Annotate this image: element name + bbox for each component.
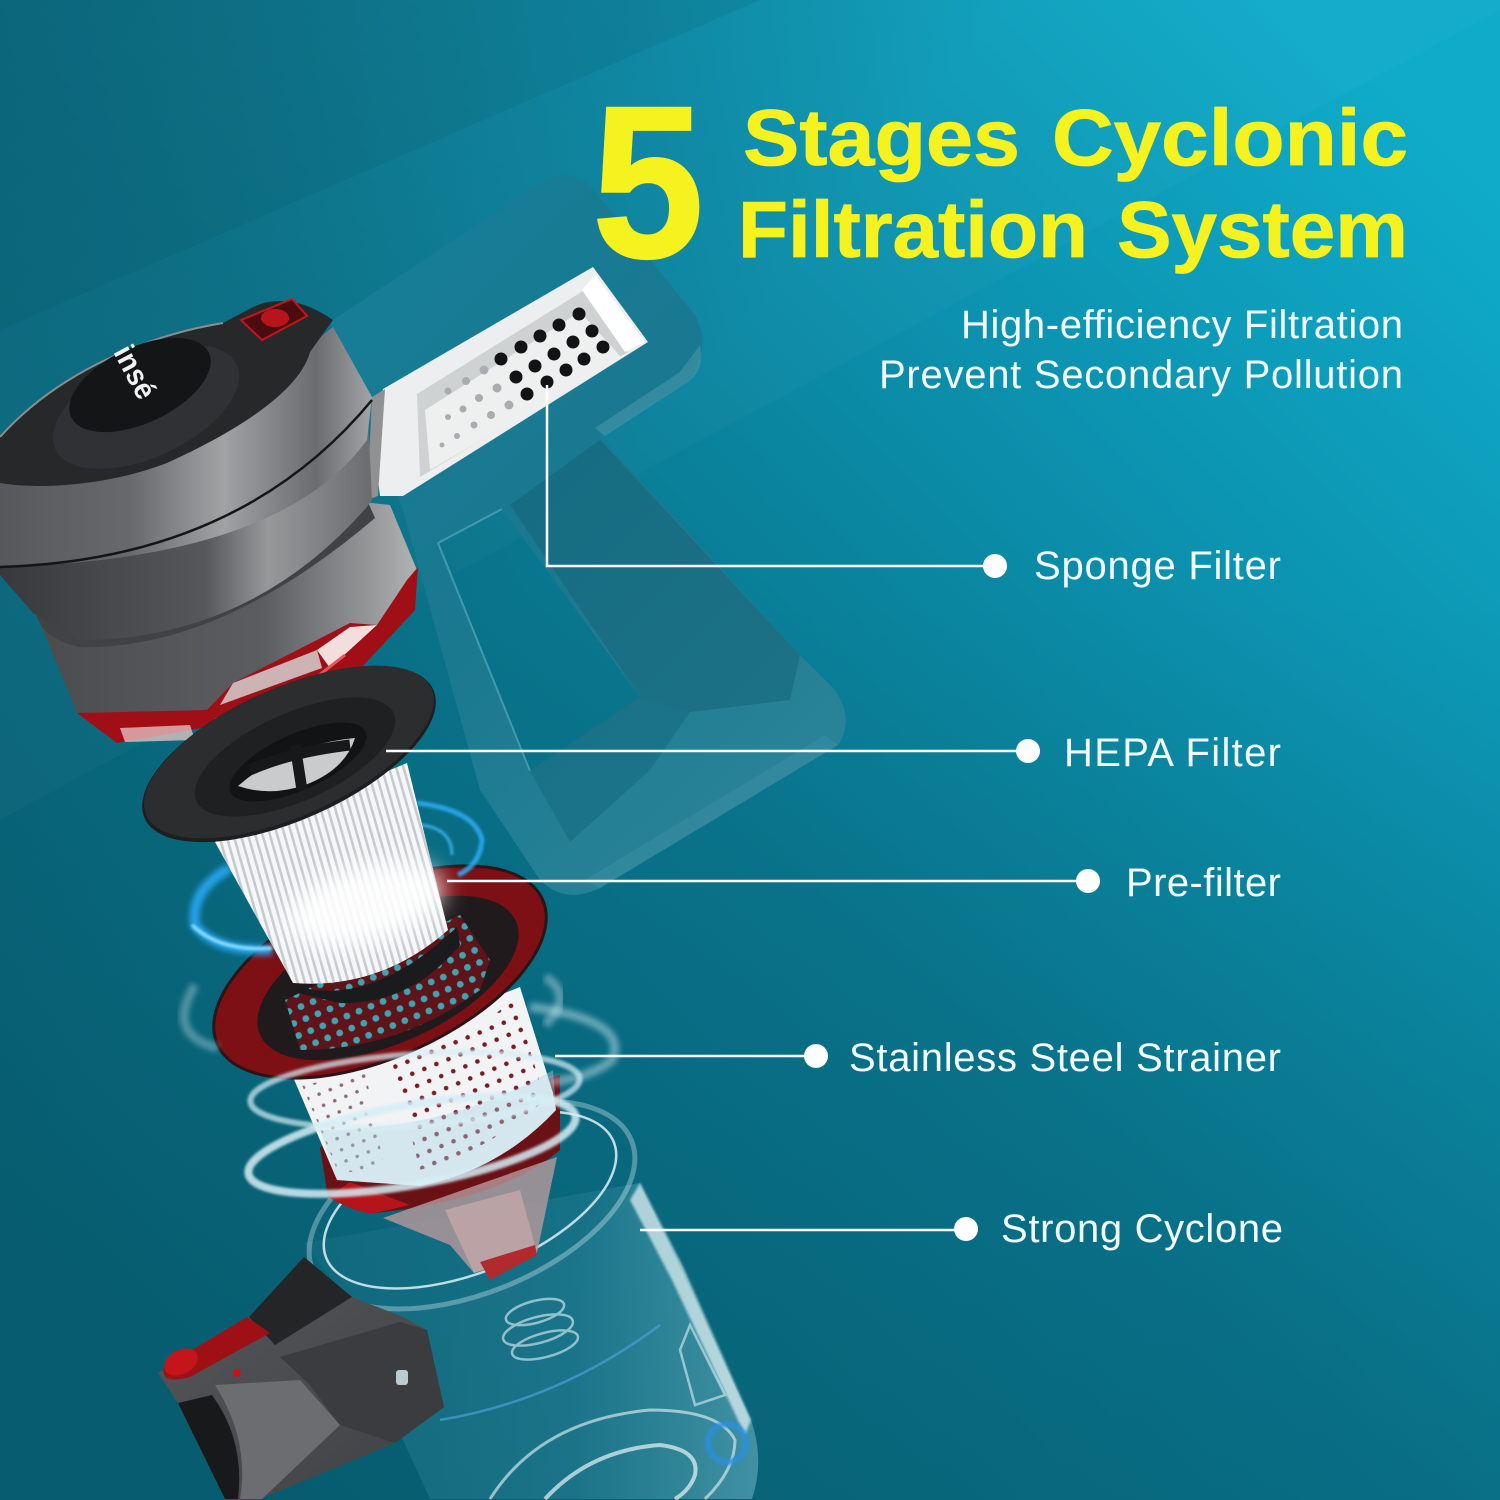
title number 5: 5 [592,61,704,303]
callout: pre-filter [447,861,1281,905]
title: Filtration [738,185,1088,274]
subtitle [879,303,1403,397]
subtitle: Prevent Secondary Pollution [879,353,1403,397]
stainless steel strainer [293,987,556,1186]
subtitle: High-efficiency Filtration [961,303,1403,347]
red strainer ring [183,822,577,1122]
inner mesh [285,915,490,1050]
vacuum handle (translucent) [330,175,846,895]
callout: strong cyclone [640,1207,1283,1251]
red trim [77,567,418,743]
title: Cyclonic [1052,93,1408,182]
callout: stainless steel strainer [555,1036,1281,1080]
motor: silver ring [37,500,375,647]
red cone below strainer [320,1075,560,1280]
blue swirl, back [192,803,482,950]
vent plate [367,267,648,500]
title: Stages [743,93,1020,182]
callout: pre-filter: Pre-filter [1126,861,1281,905]
title: System [1117,185,1408,274]
motor: lower body [37,500,417,743]
swirl around strainer [184,977,615,1213]
callout: sponge filter: Sponge Filter [1034,544,1281,588]
floor brush connector [158,1257,444,1499]
callout: strong cyclone: Strong Cyclone [1001,1207,1283,1251]
callout: hepa filter: HEPA Filter [1064,731,1281,775]
callout: sponge filter [547,385,1281,588]
hepa lid [118,629,460,879]
hepa filter cylinder [215,763,460,1003]
motor: upper band [0,327,372,567]
callout: stainless steel strainer: Stainless Steel Strainer [849,1036,1281,1080]
motor head [0,299,418,743]
motor: cap top [0,301,333,486]
logo: insé [107,340,162,405]
callout: hepa filter [386,731,1281,775]
title [738,93,1408,274]
dust cup [280,1059,758,1499]
motor: middle band [0,395,372,640]
power button [241,299,307,340]
